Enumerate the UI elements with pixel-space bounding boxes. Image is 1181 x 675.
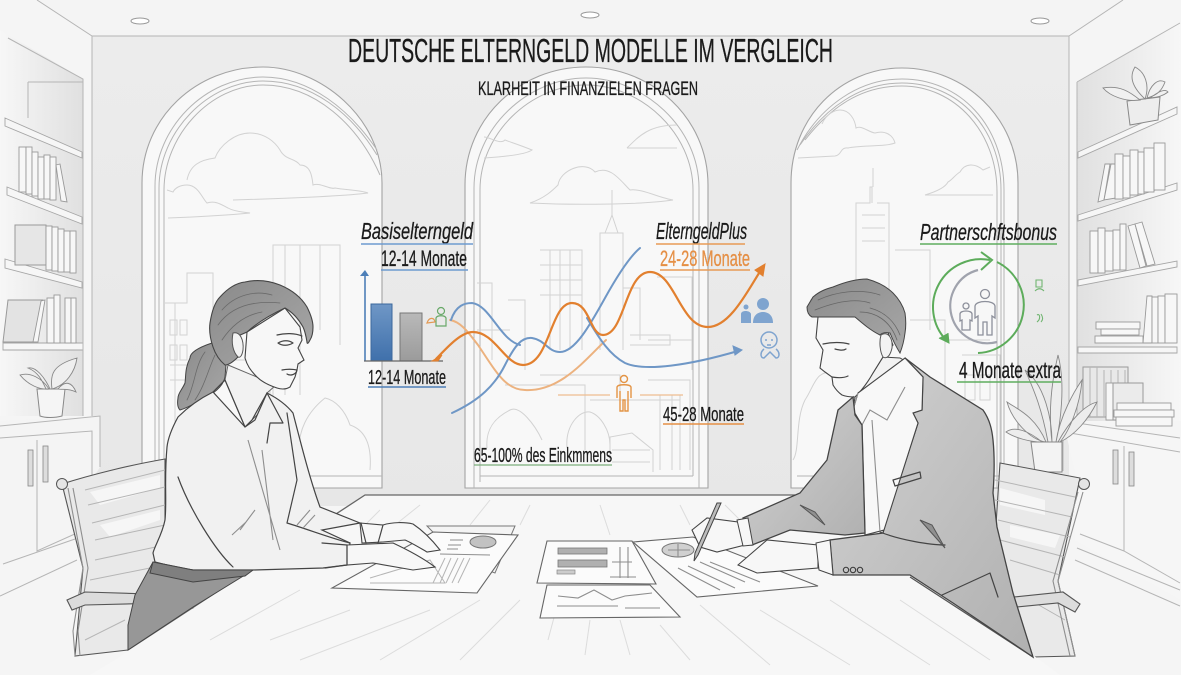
shirt	[153, 392, 360, 570]
eye and mouth	[823, 342, 849, 378]
icon: parent with baby	[427, 308, 446, 326]
icon: baby	[761, 332, 779, 358]
duration label: 12-14 Monate	[381, 246, 467, 271]
title: DEUTSCHE ELTERNGELD MODELLE IM VERGLEICH	[348, 32, 833, 69]
heading: Basiselterngeld	[361, 218, 474, 244]
neck	[225, 365, 276, 427]
right bookshelf	[1063, 23, 1181, 606]
ear	[232, 333, 243, 357]
documents center	[537, 541, 680, 618]
income label: 65-100% des Einkmmens	[474, 445, 612, 467]
duration label: 4 Monate extra	[959, 357, 1061, 383]
icon: pen	[694, 503, 721, 561]
duration label: 24-28 Monate	[660, 246, 750, 271]
panel: Partnerschaftsbonus	[920, 219, 1061, 383]
income label	[474, 445, 612, 467]
shirt	[853, 358, 923, 535]
hair	[210, 281, 313, 365]
right chair	[955, 463, 1090, 657]
duration label: 45-28 Monate	[663, 404, 744, 426]
cycle icon	[933, 252, 1024, 353]
documents left	[332, 526, 518, 593]
subtitle: KLARHEIT IN FINANZIELEN FRAGEN	[478, 79, 698, 100]
cabinet	[1063, 421, 1181, 606]
hands	[360, 523, 440, 552]
left window	[142, 67, 382, 488]
chart: comparison curves	[432, 248, 765, 413]
cabinet	[0, 416, 100, 596]
heading: ElterngeldPlus	[656, 218, 747, 244]
face	[816, 317, 893, 397]
small green glyphs	[1035, 280, 1044, 322]
icon: person	[617, 376, 631, 411]
left bookshelf	[0, 30, 100, 596]
panel: ElterngeldPlus	[558, 218, 779, 426]
middle window	[465, 67, 708, 488]
ear	[880, 334, 892, 358]
face	[245, 308, 304, 389]
left chair	[56, 459, 193, 656]
icon: family	[960, 290, 995, 335]
jacket back	[830, 358, 1033, 657]
cuffs and hands	[692, 518, 745, 552]
woman	[128, 281, 440, 650]
panel: Basiselterngeld	[360, 218, 474, 389]
eye and mouth	[277, 334, 302, 375]
bar chart	[360, 270, 443, 361]
table	[90, 495, 1060, 675]
trousers	[128, 562, 253, 650]
right window	[791, 68, 1018, 488]
icon: shelf plant	[1103, 67, 1168, 125]
books	[1083, 143, 1177, 426]
neck	[853, 357, 907, 425]
documents right	[633, 537, 818, 597]
duration label: 12-14 Monate	[368, 367, 446, 389]
heading: Partnerschftsbonus	[920, 219, 1057, 245]
ponytail	[178, 343, 226, 410]
icon: floor plant	[1006, 355, 1097, 472]
icon: parent and child	[741, 298, 773, 323]
hair	[807, 279, 906, 353]
books	[3, 147, 76, 343]
icon: left plant	[20, 358, 77, 418]
man	[692, 279, 1033, 657]
jacket front arm	[743, 397, 865, 545]
